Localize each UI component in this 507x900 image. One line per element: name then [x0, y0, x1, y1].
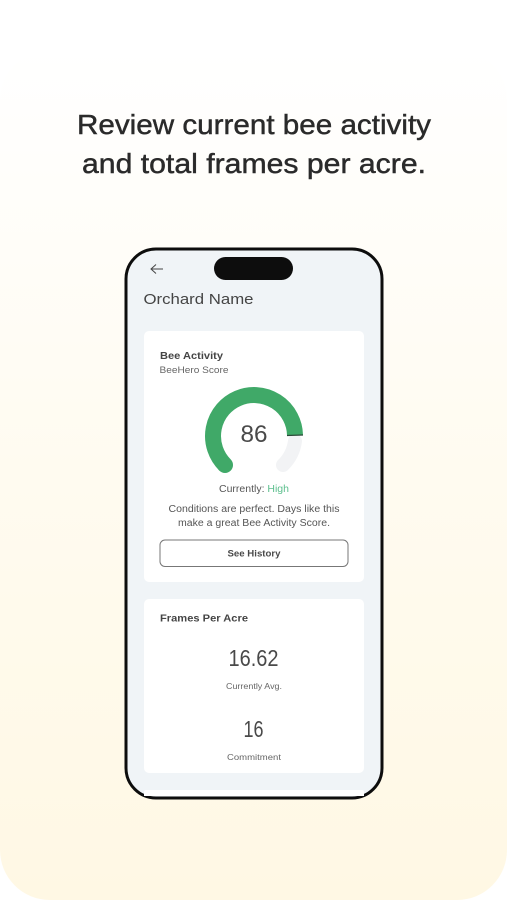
description: make a great Bee Activity Score. [178, 518, 330, 529]
current average label: Currently Avg. [226, 681, 282, 691]
commitment value: 16 [244, 716, 264, 742]
description: Conditions are perfect. Days like this [168, 504, 340, 515]
phone body [126, 249, 382, 798]
button: see history: See History [228, 548, 281, 560]
phone mockup [126, 249, 382, 798]
current average value: 16.62 [228, 645, 278, 671]
button: see history [160, 540, 348, 566]
title: and total frames per acre. [82, 148, 426, 179]
camera notch [214, 257, 293, 280]
screen heading: Orchard Name [144, 291, 254, 308]
next card peek [144, 790, 364, 796]
panel: bee activity [144, 331, 364, 582]
card background [144, 331, 364, 582]
title [77, 109, 431, 179]
icon: back arrow [151, 264, 163, 274]
title: Review current bee activity [77, 109, 431, 140]
card heading: Bee Activity [160, 350, 223, 362]
commitment label: Commitment [227, 752, 282, 762]
description [168, 504, 340, 529]
gauge chart [213, 395, 303, 473]
card heading: Frames Per Acre [160, 612, 248, 624]
gauge value: 86 [240, 421, 268, 448]
current status: Currently: High [219, 484, 289, 495]
card subheading: BeeHero Score [160, 365, 228, 376]
card background [144, 599, 364, 773]
panel: frames per acre [144, 599, 364, 773]
